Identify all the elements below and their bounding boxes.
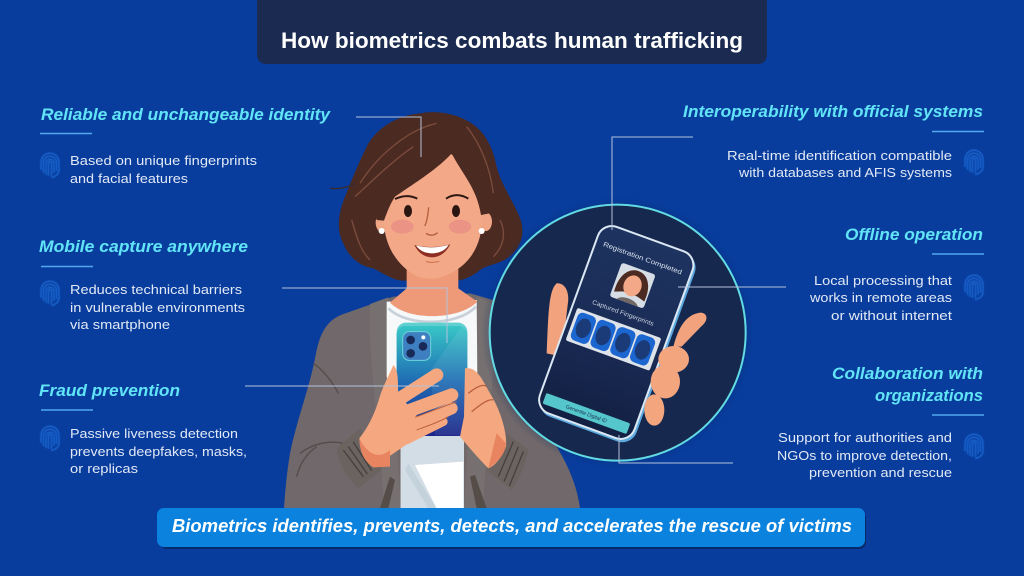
phone: Captured Fingerprints: [591, 299, 655, 328]
panel: fraud prevention: Fraud prevention: [39, 381, 180, 400]
panel: collaboration: NGOs to improve detection,: [777, 448, 952, 463]
panel: interoperability: Interoperability with official systems: [683, 102, 983, 121]
circle magnified phone: [481, 196, 754, 469]
panel: fraud prevention: prevents deepfakes, masks,: [70, 444, 247, 459]
neck: [390, 263, 477, 316]
panel: mobile capture: via smartphone: [70, 317, 170, 332]
panel: collaboration: organizations: [875, 386, 983, 405]
panel: interoperability: [683, 102, 984, 180]
panel: mobile capture: in vulnerable environments: [70, 300, 246, 315]
shirt: [387, 300, 477, 508]
bottom banner: [157, 508, 866, 549]
panel: interoperability: with databases and AFIS systems: [738, 165, 953, 180]
panel: reliable identity: and facial features: [70, 171, 189, 186]
panel: reliable identity: Reliable and unchangeable identity: [41, 105, 332, 124]
fingers over phone: [644, 313, 706, 426]
ears: [376, 212, 492, 232]
title bar: [257, 0, 767, 64]
profile photo: [610, 263, 656, 309]
bottom banner: Biometrics identifies, prevents, detects, and accelerates the rescue of victims: [172, 516, 852, 536]
illustration: woman holding phone: [284, 112, 580, 508]
generate digital ID button: Generate Digital ID: [565, 404, 608, 425]
phone: [534, 222, 700, 447]
panel: offline operation: Offline operation: [845, 225, 983, 244]
panel: collaboration: prevention and rescue: [809, 465, 952, 480]
phone: Registration Completed: [602, 241, 683, 276]
right hand: [460, 368, 506, 468]
panel: offline operation: Local processing that: [814, 273, 952, 288]
cardigan front panels and creases: [297, 297, 494, 508]
panel: fraud prevention: or replicas: [70, 461, 139, 476]
cardigan: [284, 293, 580, 508]
nose: [425, 207, 438, 235]
panel: offline operation: works in remote areas: [809, 290, 953, 305]
panel: collaboration: Support for authorities and: [778, 430, 952, 445]
mouth: [414, 244, 450, 262]
hair back: [339, 112, 522, 281]
face: [383, 153, 482, 279]
hair fringe: [375, 132, 490, 221]
panel: mobile capture: Reduces technical barriers: [70, 282, 243, 297]
panel: interoperability: Real-time identification compatible: [727, 148, 952, 163]
left hand: [359, 365, 457, 467]
captured fingerprints card: [566, 308, 661, 371]
panel: collaboration: Collaboration with: [832, 364, 983, 383]
hair highlights: [330, 123, 503, 260]
panel: reliable identity: [40, 105, 332, 186]
connector lines: [245, 117, 786, 463]
phone held: [397, 323, 467, 436]
title bar: How biometrics combats human trafficking: [281, 28, 743, 53]
panel: offline operation: [809, 225, 984, 323]
generate digital ID button: [543, 393, 630, 434]
panel: offline operation: or without internet: [831, 308, 952, 323]
eyes and brows: [395, 195, 468, 217]
panel: mobile capture: [39, 237, 248, 332]
panel: reliable identity: Based on unique fingerprints: [70, 153, 258, 168]
finger behind phone: [547, 283, 568, 357]
panel: collaboration: [777, 364, 984, 480]
earrings: [379, 228, 485, 234]
cuffs: [337, 428, 528, 490]
panel: fraud prevention: Passive liveness detection: [70, 426, 238, 441]
panel: fraud prevention: [39, 381, 247, 476]
panel: mobile capture: Mobile capture anywhere: [39, 237, 248, 256]
cheeks: [391, 220, 471, 234]
